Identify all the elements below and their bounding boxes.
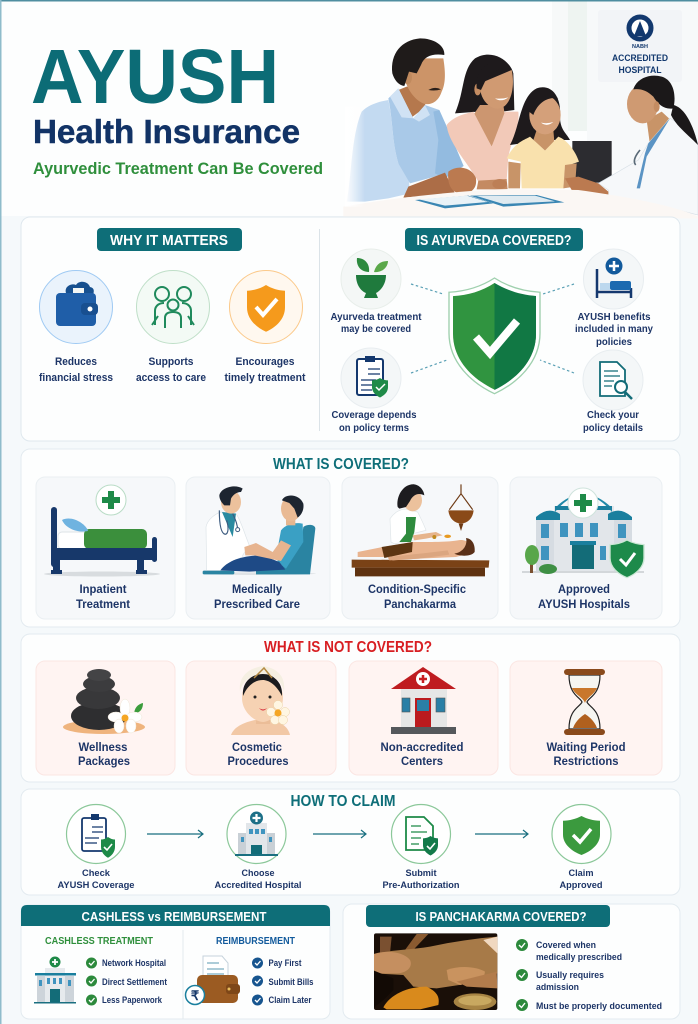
illustration: panchakarma therapy — [352, 484, 489, 576]
heading: is ayurveda covered: IS AYURVEDA COVERED? — [416, 233, 572, 249]
icon: central shield with check — [449, 278, 540, 394]
label — [214, 582, 300, 611]
text: check your policy details — [583, 410, 643, 434]
label: Accredited Hospital — [214, 880, 302, 890]
list: reimbursement steps: Claim Later — [268, 995, 312, 1005]
label: Cosmetic — [232, 740, 282, 754]
card: condition-specific panchakarma — [342, 477, 498, 619]
panel: why it matters and is ayurveda covered — [21, 217, 680, 441]
label — [368, 582, 466, 611]
icon: document with magnifier — [583, 350, 643, 410]
icon: wallet with rupee: ₹ — [191, 988, 200, 1003]
card: medically prescribed care — [186, 477, 330, 619]
text: check your policy details: policy details — [583, 423, 643, 434]
icon: herb mortar — [341, 249, 401, 309]
text: reduces financial stress: Reduces — [55, 356, 97, 368]
label — [78, 740, 130, 768]
girl — [507, 87, 579, 188]
text: coverage depends on policy terms: Coverage depends — [332, 410, 417, 421]
badge: NABH accredited hospital — [598, 10, 682, 82]
label: Inpatient — [80, 582, 127, 596]
label: Prescribed Care — [214, 597, 300, 611]
panel: what is covered — [21, 449, 680, 627]
list: panchakarma conditions — [516, 939, 662, 1012]
list: reimbursement steps: Pay First — [268, 958, 302, 968]
label: Waiting Period — [546, 740, 626, 754]
heading: is ayurveda covered — [405, 228, 583, 251]
label: AYUSH Hospitals — [538, 597, 630, 611]
label: Packages — [78, 754, 130, 768]
text: ayurveda treatment may be covered: may be covered — [341, 324, 411, 335]
label: Claim — [568, 868, 594, 878]
label: Approved — [560, 880, 602, 890]
subtitle: Health Insurance: Health Insurance — [33, 113, 300, 150]
label — [228, 740, 289, 768]
text: supports access to care: Supports — [148, 356, 194, 368]
text: supports access to care: access to care — [136, 372, 206, 384]
label: Condition-Specific — [368, 582, 466, 596]
arrow — [313, 830, 366, 838]
list: reimbursement steps — [252, 958, 314, 1006]
text: ayush benefits included in many policies: included in many — [575, 324, 653, 335]
subheading: cashless treatment: CASHLESS TREATMENT — [45, 935, 154, 947]
label — [380, 740, 464, 768]
text: ayush benefits included in many policies: AYUSH benefits — [578, 312, 651, 323]
list: cashless benefits: Direct Settlement — [102, 977, 167, 987]
text: ayurveda treatment may be covered: Ayurveda treatment — [330, 312, 422, 323]
label: Check — [82, 868, 111, 878]
icon: bed with plus — [584, 249, 644, 309]
label — [214, 868, 302, 890]
label — [546, 740, 626, 768]
label — [58, 868, 134, 890]
label — [538, 582, 630, 611]
arrow — [475, 830, 528, 838]
card: non-accredited centers — [349, 661, 498, 775]
text: supports access to care — [136, 356, 206, 384]
label: Pre-Authorization — [382, 880, 460, 890]
title: AYUSH: AYUSH — [31, 34, 279, 120]
panel: how to claim — [21, 789, 680, 895]
list: cashless benefits — [86, 958, 167, 1006]
label: Treatment — [76, 597, 130, 611]
panel: cashless vs reimbursement — [21, 905, 330, 1019]
text: coverage depends on policy terms: on policy terms — [339, 423, 409, 434]
list: panchakarma conditions: Covered when — [536, 940, 596, 951]
text: coverage depends on policy terms — [332, 410, 417, 434]
list: cashless benefits: Network Hospital — [102, 958, 166, 968]
badge: NABH accredited hospital: ACCREDITED — [612, 53, 668, 64]
list: panchakarma conditions: Must be properly documented — [536, 1001, 662, 1012]
panel: is panchakarma covered — [343, 904, 680, 1019]
icon: wallet with rupee — [186, 956, 240, 1004]
list: cashless benefits: Less Paperwork — [102, 995, 163, 1005]
icon: clipboard with shield — [341, 348, 401, 408]
label: AYUSH Coverage — [58, 880, 134, 890]
label: Wellness — [78, 740, 128, 754]
card: wellness packages — [36, 661, 175, 775]
label: Choose — [242, 868, 274, 878]
list: panchakarma conditions: admission — [536, 982, 579, 993]
badge: NABH accredited hospital: NABH — [632, 44, 648, 50]
list: panchakarma conditions: Usually requires — [536, 970, 604, 981]
header bar — [21, 905, 330, 926]
text: ayush benefits included in many policies — [575, 312, 653, 348]
icon: family group — [136, 270, 210, 344]
text: encourages timely treatment: Encourages — [236, 356, 294, 368]
label: Submit — [406, 868, 437, 878]
heading: how to claim: HOW TO CLAIM — [290, 793, 396, 810]
list: reimbursement steps: Submit Bills — [268, 977, 314, 987]
doctor — [565, 76, 698, 215]
card: waiting period restrictions — [510, 661, 662, 775]
illustration: doctor and patient — [203, 486, 316, 575]
man — [347, 38, 476, 202]
label: Medically — [232, 582, 282, 596]
tagline: Ayurvedic Treatment Can Be Covered — [33, 159, 323, 178]
photo: massage therapy — [374, 933, 497, 1010]
step: claim approved — [552, 804, 611, 890]
heading: why it matters — [97, 228, 242, 251]
heading: why it matters: WHY IT MATTERS — [110, 233, 228, 249]
label: Non-accredited — [380, 740, 464, 754]
label: Procedures — [228, 754, 289, 768]
step: check ayush coverage — [58, 804, 134, 890]
label — [76, 582, 130, 611]
label — [560, 868, 602, 890]
heading pill — [366, 905, 610, 927]
text: encourages timely treatment: timely treatment — [224, 372, 306, 384]
woman — [447, 55, 519, 189]
heading: what is not covered: WHAT IS NOT COVERED? — [264, 639, 432, 656]
hero illustration: family with doctor at table — [343, 38, 698, 218]
step: submit pre-authorization — [382, 804, 460, 890]
table with folders — [343, 189, 698, 218]
text: check your policy details: Check your — [587, 410, 639, 421]
heading: what is covered: WHAT IS COVERED? — [273, 456, 409, 473]
label: Approved — [558, 582, 610, 596]
subheading: reimbursement: REIMBURSEMENT — [216, 935, 295, 947]
step: choose accredited hospital — [214, 804, 302, 890]
badge: NABH accredited hospital: HOSPITAL — [618, 65, 662, 76]
arrow — [147, 830, 203, 838]
text: ayurveda treatment may be covered — [330, 312, 422, 335]
label: Centers — [401, 754, 443, 768]
text: reduces financial stress — [39, 356, 113, 384]
text: encourages timely treatment — [224, 356, 306, 384]
heading pill: IS PANCHAKARMA COVERED? — [416, 909, 587, 924]
icon: wallet — [40, 270, 112, 344]
icon: small hospital — [34, 956, 76, 1004]
connector lines — [411, 284, 574, 373]
label: Panchakarma — [384, 597, 456, 611]
header title: CASHLESS vs REIMBURSEMENT — [82, 909, 267, 924]
list: panchakarma conditions: medically prescribed — [536, 952, 622, 963]
card: inpatient treatment — [36, 477, 175, 619]
card: approved ayush hospitals — [510, 477, 662, 619]
label: Restrictions — [554, 754, 619, 768]
text: ayush benefits included in many policies: policies — [596, 337, 632, 348]
label — [382, 868, 460, 890]
icon: orange shield — [230, 270, 302, 344]
panel: what is not covered — [21, 634, 680, 782]
text: reduces financial stress: financial stress — [39, 372, 113, 384]
card: cosmetic procedures — [186, 661, 336, 775]
